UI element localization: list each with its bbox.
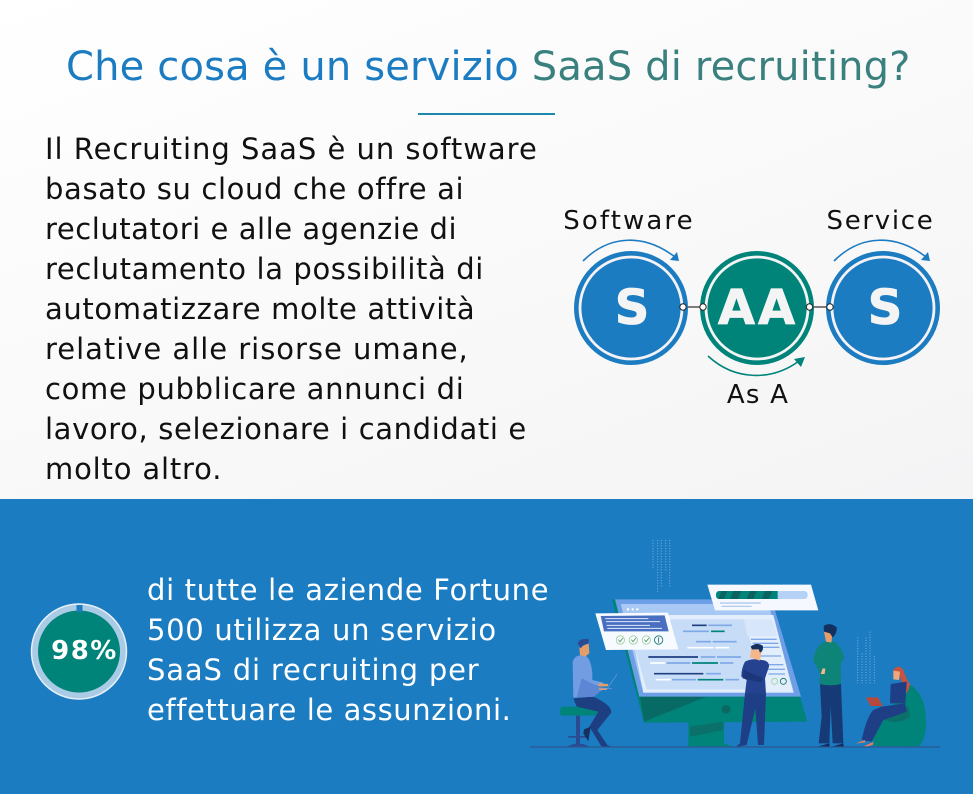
text block: definition (45, 132, 538, 486)
diagram: SaaS acronym circles (563, 206, 940, 410)
person: seated man (560, 639, 617, 747)
panel: bottom blue band (0, 499, 973, 794)
circle: AA (700, 251, 814, 365)
chart: 98% progress ring (30, 603, 128, 700)
title: Che cosa è un servizio SaaS di recruiting? (66, 44, 911, 90)
text block: definition: reclutatori e alle agenzie di (45, 212, 457, 246)
label: As A: As A (727, 380, 789, 410)
text block: definition: molto altro. (45, 452, 222, 486)
label: 98%: 98% (51, 636, 118, 666)
panel: top background (0, 0, 973, 499)
arrow: under AA (708, 356, 805, 375)
illustration: team around a monitor (530, 540, 940, 748)
text block: definition: lavoro, selezionare i candidati e (45, 412, 527, 446)
circle: first S: S (615, 280, 649, 336)
title underline (418, 113, 555, 115)
label: Service: Service (826, 206, 934, 236)
text block: definition: relative alle risorse umane, (45, 332, 469, 366)
person: standing man in green (813, 624, 844, 747)
text block: statistic (147, 573, 549, 727)
text block: definition: reclutamento la possibilità di (45, 252, 484, 286)
card: checklist (595, 613, 678, 650)
text block: definition: come pubblicare annunci di (45, 372, 464, 406)
text block: definition: automatizzare molte attività (45, 292, 475, 326)
text block: statistic: di tutte le aziende Fortune (147, 573, 549, 607)
card: progress bar (707, 585, 818, 610)
text block: statistic: 500 utilizza un servizio (147, 613, 497, 647)
text block: definition: basato su cloud che offre ai (45, 172, 464, 206)
monitor (612, 599, 807, 747)
person: standing man in centre (735, 644, 769, 747)
text block: statistic: effettuare le assunzioni. (147, 693, 511, 727)
arrow: over last S (834, 240, 930, 261)
circle: last S (826, 251, 940, 365)
connector lines (683, 306, 830, 308)
connector nodes (680, 304, 833, 310)
text block: definition: Il Recruiting SaaS è un software (45, 132, 538, 166)
person: woman on beanbag with laptop (856, 667, 926, 747)
circle: first S (574, 251, 688, 365)
text block: statistic: SaaS di recruiting per (147, 653, 480, 687)
data dots (653, 540, 874, 683)
floor line (530, 746, 940, 748)
circle: AA: AA (718, 280, 798, 336)
label: Software: Software (563, 206, 695, 236)
circle: last S: S (868, 280, 902, 336)
arrow: over first S (583, 240, 679, 261)
